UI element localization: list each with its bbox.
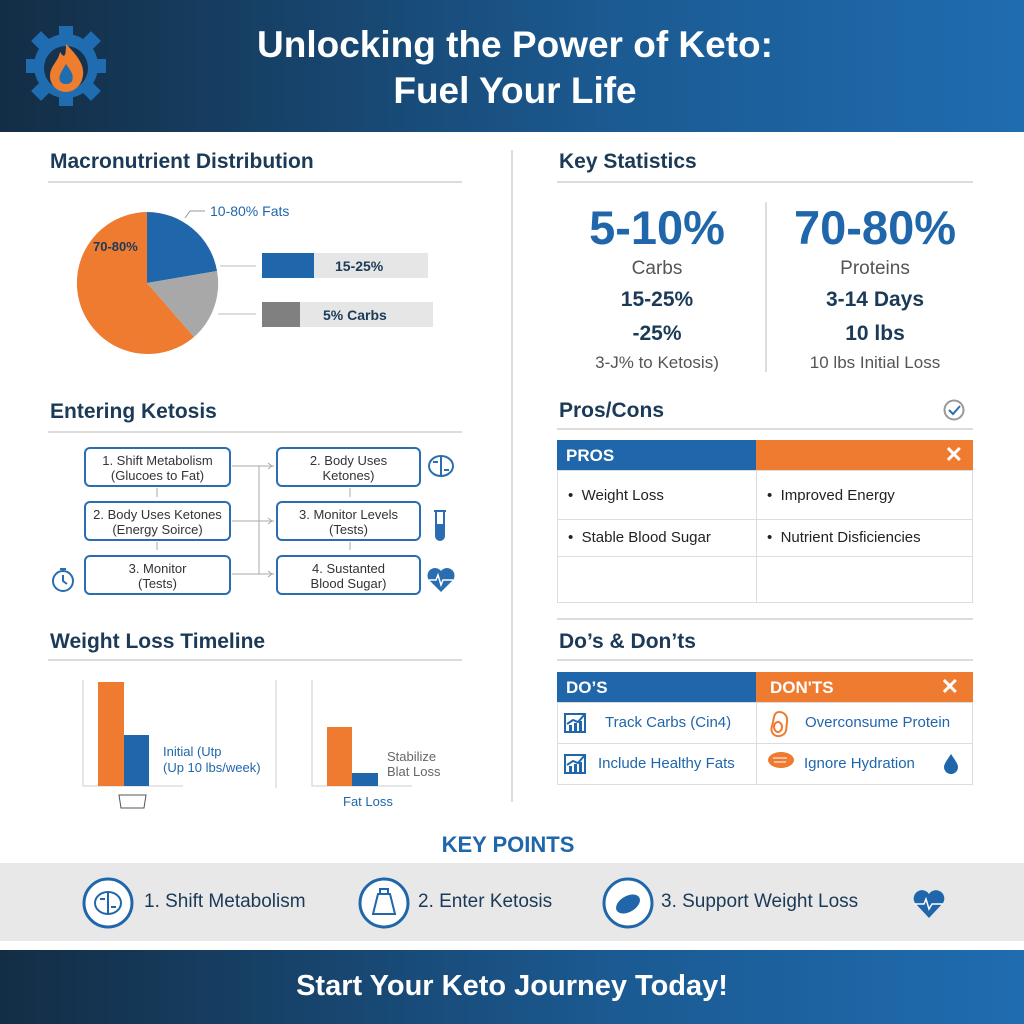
table: Include Healthy Fats xyxy=(598,755,735,772)
heading: Do’s & Don’ts xyxy=(559,630,696,653)
panel: dos donts xyxy=(557,618,973,785)
bar charts: Initial (Utp xyxy=(163,744,222,759)
bar charts xyxy=(82,680,441,809)
icons xyxy=(564,711,958,774)
title: Fuel Your Life xyxy=(393,70,637,111)
table: Overconsume Protein xyxy=(805,714,950,731)
table: • Stable Blood Sugar xyxy=(568,529,711,546)
stat left xyxy=(589,201,725,372)
step boxes: 1. Shift Metabolism xyxy=(102,453,213,468)
table: • Improved Energy xyxy=(767,487,895,504)
table xyxy=(557,440,973,603)
title xyxy=(257,24,773,111)
stat right: Proteins xyxy=(840,258,910,279)
header xyxy=(0,0,1024,132)
title: Unlocking the Power of Keto: xyxy=(257,24,773,65)
panel: entering ketosis: Blood Sugar) xyxy=(311,576,386,591)
stat left: 15-25% xyxy=(621,288,693,311)
table: DON'TS xyxy=(770,678,834,697)
icon: heart xyxy=(914,890,944,918)
step boxes xyxy=(84,447,231,487)
bar charts: Blat Loss xyxy=(387,764,441,779)
table: DO’S xyxy=(566,678,608,697)
panel: entering ketosis: 2. Body Uses xyxy=(310,453,387,468)
pie chart: 70-80% xyxy=(93,239,138,254)
heading: Key Statistics xyxy=(559,150,697,173)
table: ✕ xyxy=(945,442,963,467)
table: • Nutrient Disficiencies xyxy=(767,529,921,546)
key point 2: 2. Enter Ketosis xyxy=(418,891,552,912)
table: ✕ xyxy=(941,674,959,699)
table: PROS xyxy=(566,446,614,465)
table xyxy=(557,672,973,785)
stat left: 5-10% xyxy=(589,201,725,254)
icon: gear flame xyxy=(26,26,106,106)
stat right: 10 lbs Initial Loss xyxy=(810,353,940,372)
panel: key statistics xyxy=(557,150,973,372)
bar charts: Fat Loss xyxy=(343,794,393,809)
footer xyxy=(0,950,1024,1024)
stat left: -25% xyxy=(632,322,682,345)
footer: Start Your Keto Journey Today! xyxy=(296,970,728,1002)
divider vertical xyxy=(511,150,513,802)
panel: entering ketosis: 4. Sustanted xyxy=(312,561,385,576)
panel: entering ketosis: (Energy Soirce) xyxy=(112,522,203,537)
icon: check xyxy=(944,400,964,420)
panel: entering ketosis: (Tests) xyxy=(329,522,368,537)
stat right: 70-80% xyxy=(794,201,956,254)
key point 1: 1. Shift Metabolism xyxy=(144,891,306,912)
stat left: Carbs xyxy=(632,258,682,279)
key points title: KEY POINTS xyxy=(442,832,574,857)
panel: entering ketosis: Ketones) xyxy=(322,468,375,483)
pie chart: 15-25% xyxy=(335,258,384,274)
key points band xyxy=(0,863,1024,941)
heading: Pros/Cons xyxy=(559,399,664,422)
key point 3: 3. Support Weight Loss xyxy=(661,891,858,912)
heading: Entering Ketosis xyxy=(50,400,217,423)
panel: weight loss timeline xyxy=(48,630,462,809)
panel: entering ketosis: 3. Monitor Levels xyxy=(299,507,398,522)
pie chart: 5% Carbs xyxy=(323,307,387,323)
step boxes: (Glucoes to Fat) xyxy=(111,468,204,483)
stat left: 3-J% to Ketosis) xyxy=(595,353,719,372)
stat right: 3-14 Days xyxy=(826,288,924,311)
bar charts: Stabilize xyxy=(387,749,436,764)
stat right: 10 lbs xyxy=(845,322,905,345)
panel: macronutrient xyxy=(48,150,462,354)
key point 3 xyxy=(602,878,858,928)
icons xyxy=(52,455,454,592)
key point 1 xyxy=(82,878,306,928)
table: Ignore Hydration xyxy=(804,755,915,772)
table: Track Carbs (Cin4) xyxy=(605,714,731,731)
pie chart xyxy=(76,203,433,354)
panel: entering ketosis: (Tests) xyxy=(138,576,177,591)
panel: entering ketosis: 3. Monitor xyxy=(129,561,186,576)
pie chart: 10-80% Fats xyxy=(210,203,289,219)
heading: Macronutrient Distribution xyxy=(50,150,314,173)
bar charts: (Up 10 lbs/week) xyxy=(163,760,261,775)
heading: Weight Loss Timeline xyxy=(50,630,265,653)
key point 2 xyxy=(358,878,552,928)
stat right xyxy=(794,201,956,372)
panel: pros cons xyxy=(557,399,973,603)
table: • Weight Loss xyxy=(568,487,664,504)
panel: entering ketosis: 2. Body Uses Ketones xyxy=(93,507,222,522)
panel: entering ketosis xyxy=(48,400,462,595)
flow connectors xyxy=(156,462,350,578)
